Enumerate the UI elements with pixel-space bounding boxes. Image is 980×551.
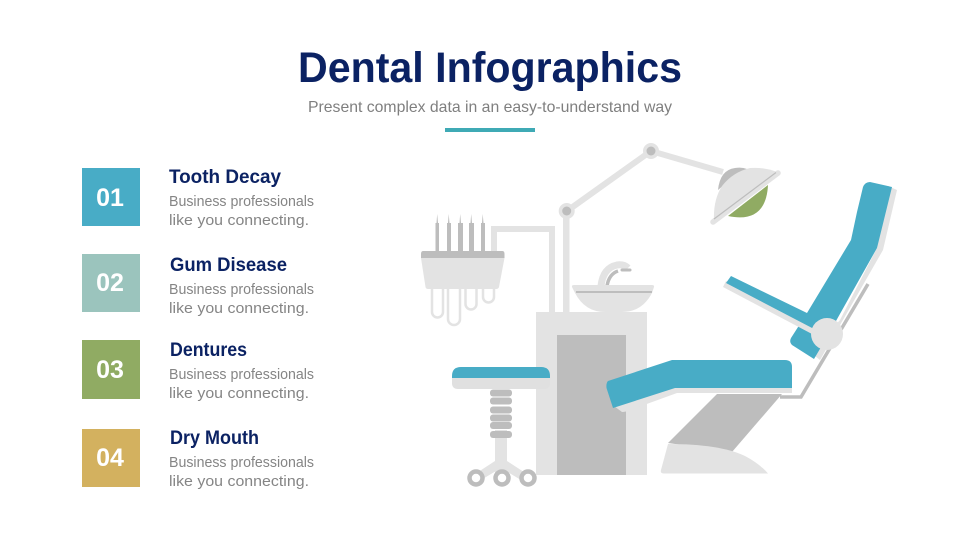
badge 02 (82, 254, 140, 312)
item 03: dentures (82, 340, 314, 402)
item 04: dry mouth (82, 428, 314, 490)
item 01: tooth decay (82, 167, 314, 229)
item 02: gum disease (82, 254, 314, 317)
description 04: like you connecting. (169, 473, 309, 490)
badge 04: 04 (96, 444, 124, 472)
badge 03: 03 (96, 356, 124, 384)
pole and upper arm (559, 143, 723, 312)
description 02 (169, 281, 314, 317)
heading: gum disease: Gum Disease (170, 255, 287, 276)
chair base (661, 394, 782, 474)
hoses (432, 288, 494, 325)
tray arm (494, 229, 552, 312)
chair frame line (780, 284, 868, 397)
description 04 (169, 454, 314, 490)
badge 02: 02 (96, 269, 124, 297)
tools (436, 214, 485, 252)
badge 01: 01 (96, 184, 124, 212)
description 04: Business professionals (169, 454, 314, 471)
stool (452, 367, 550, 484)
title underline (445, 128, 535, 132)
illustration: dental unit and chair (421, 143, 897, 484)
description 03: Business professionals (169, 366, 314, 383)
instrument tray (421, 214, 504, 325)
armrest (723, 276, 818, 334)
chair pivot (811, 318, 843, 350)
lamp (713, 168, 778, 222)
chair back (790, 182, 897, 360)
title: Dental Infographics (298, 44, 682, 92)
badge 01 (82, 168, 140, 226)
description 02: like you connecting. (169, 300, 309, 317)
description 01: Business professionals (169, 193, 314, 210)
heading: tooth decay: Tooth Decay (169, 167, 281, 188)
heading: dry mouth: Dry Mouth (170, 428, 259, 449)
description 03 (169, 366, 314, 402)
subtitle: Present complex data in an easy-to-understand way (308, 99, 672, 116)
description 01 (169, 193, 314, 229)
description 01: like you connecting. (169, 212, 309, 229)
badge 04 (82, 429, 140, 487)
cabinet (536, 312, 647, 475)
heading: dentures: Dentures (170, 340, 247, 361)
description 03: like you connecting. (169, 385, 309, 402)
sink (572, 265, 654, 312)
chair seat (606, 360, 792, 412)
badge 03 (82, 340, 140, 399)
description 02: Business professionals (169, 281, 314, 298)
